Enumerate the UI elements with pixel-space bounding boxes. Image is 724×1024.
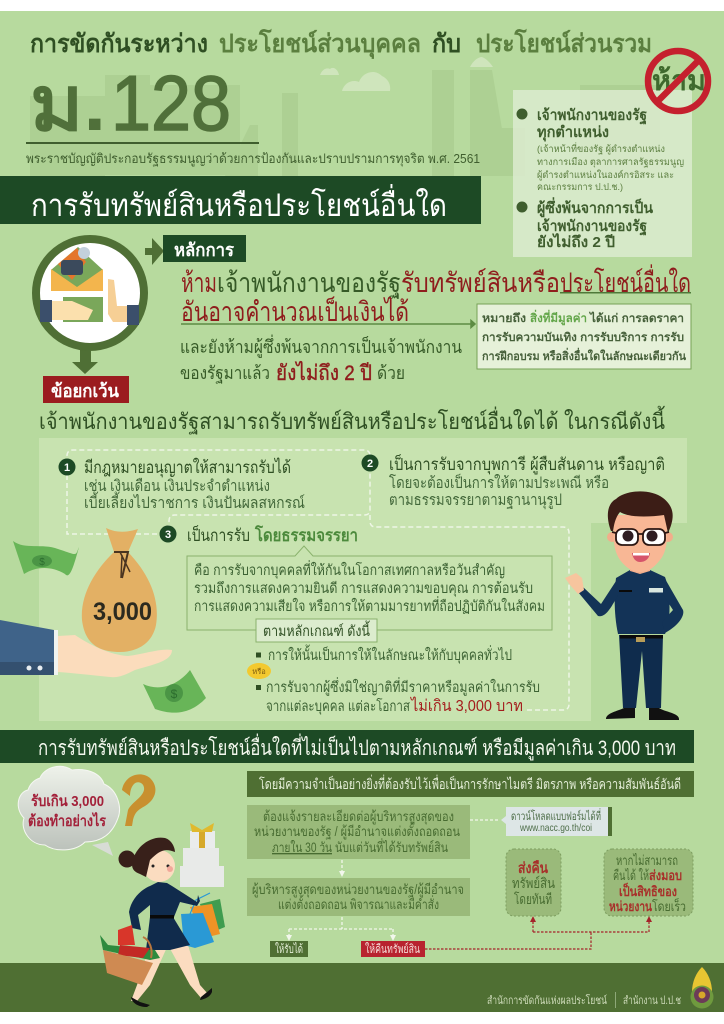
officer glasses <box>616 529 665 545</box>
woman legs <box>131 945 208 1001</box>
connector dashes <box>67 450 569 710</box>
callout: definition: การฝึกอบรม หรือสิ่งอื่นใดในลักษณะเดียวกัน <box>482 347 686 363</box>
icon: banknote bottom <box>143 670 206 713</box>
criterion one: การให้นั้นเป็นการให้ในลักษณะให้กับบุคคลทั่วไป <box>268 644 512 664</box>
bullet one detail: ทางการเมือง ตุลาการศาลรัฐธรรมนูญ <box>537 157 684 168</box>
case one: เบี้ยเลี้ยงไปราชการ เงินปันผลสหกรณ์ <box>84 491 305 512</box>
callout: definition: การรับความบันเทิง การรับบริการ การรับ <box>482 331 684 344</box>
icon: giving hand <box>0 620 172 677</box>
former official statement: ด้วย <box>377 363 405 383</box>
officer hair <box>608 491 673 533</box>
officer legs <box>619 635 663 708</box>
option: return immediately: โดยทันที <box>514 891 552 907</box>
arrow: to principle <box>145 238 164 265</box>
footer credits: สำนักงาน ป.ป.ช <box>623 995 681 1007</box>
icon: prohibited sign <box>648 51 708 111</box>
step: report <box>247 805 470 859</box>
outcome: return: ให้คืนทรัพย์สิน <box>365 942 420 956</box>
woman torso and arms <box>129 882 200 930</box>
former official statement: และยังห้ามผู้ซึ่งพ้นจากการเป็นเจ้าพนักงาน <box>180 334 462 358</box>
icon: envelope and refusing hand <box>36 239 144 347</box>
case two: เป็นการรับจากบุพการี ผู้สืบสันดาน หรือญาติ <box>389 453 665 475</box>
thought cloud <box>18 766 119 856</box>
option: hand over to agency: หากไม่สามารถ <box>616 853 678 868</box>
case one <box>58 457 305 512</box>
case three <box>160 524 358 545</box>
officer badge <box>649 588 663 592</box>
bullet one detail: (เจ้าหน้าที่ของรัฐ ผู้ดำรงตำแหน่ง <box>537 142 665 155</box>
gift basket <box>100 935 160 960</box>
bullet one <box>516 107 647 142</box>
arrow: to exception <box>72 350 98 374</box>
woman skirt <box>146 917 190 950</box>
icon: money bag <box>82 528 157 652</box>
criterion two: การรับจากผู้ซึ่งมิใช่ญาติที่มีราคาหรือมูลค่าในการรับ <box>266 677 540 696</box>
callout: download form: ดาวน์โหลดแบบฟอร์มได้ที่ <box>511 808 601 823</box>
bullet one: ทุกตำแหน่ง <box>537 124 609 142</box>
bullet two: ยังไม่ถึง 2 ปี <box>537 232 615 251</box>
case one: 1 <box>64 462 70 474</box>
label: exception <box>43 376 129 403</box>
callout: download form: www.nacc.go.th/coi <box>519 822 592 834</box>
former official statement <box>180 334 462 385</box>
case one: เช่น เงินเดือน เงินประจำตำแหน่ง <box>84 477 270 495</box>
criterion two: จากแต่ละบุคคล แต่ละโอกาส <box>266 697 410 715</box>
label: criteria <box>256 619 377 642</box>
outcome: return <box>361 941 425 957</box>
callout: download form <box>501 807 612 836</box>
case three: 3 <box>165 529 171 541</box>
note bar <box>247 771 694 797</box>
option: hand over to agency: เป็นสิทธิของ <box>619 882 677 899</box>
bullet one: เจ้าพนักงานของรัฐ <box>537 107 647 125</box>
label: principle <box>163 235 246 262</box>
case three: เป็นการรับ <box>187 524 250 545</box>
step: consider: ผู้บริหารสูงสุดของหน่วยงานของรัฐ/ผู้มีอำนาจ <box>252 882 464 898</box>
bullet one detail <box>537 142 684 193</box>
callout: ethics definition <box>187 546 552 630</box>
case three: โดยธรรมจรรยา <box>254 525 358 545</box>
label: criteria: ตามหลักเกณฑ์ ดังนี้ <box>263 620 370 640</box>
callout: definition: ได้แก่ การลดราคา <box>588 311 684 325</box>
step: consider <box>247 878 470 916</box>
principle statement: รับทรัพย์สินหรือ <box>401 267 560 298</box>
case two: ตามธรรมจรรยาตามฐานานุรูป <box>389 492 562 510</box>
title <box>30 28 652 60</box>
bullet one detail: คณะกรรมการ ป.ป.ช.) <box>537 182 623 193</box>
main heading band <box>0 176 481 224</box>
woman head <box>118 850 136 868</box>
principle statement: ห้าม <box>181 268 217 298</box>
bullet two: ผู้ซึ่งพ้นจากการเป็น <box>537 197 654 218</box>
option: return immediately: ทรัพย์สิน <box>512 875 555 891</box>
title: กับ <box>432 30 461 58</box>
bullet one detail: ผู้ดำรงตำแหน่งในองค์กรอิสระ และ <box>537 169 674 181</box>
callout: ethics definition: คือ การรับจากบุคคลที่ให้กันในโอกาสเทศกาลหรือวันสำคัญ <box>194 560 505 579</box>
case two: โดยจะต้องเป็นการให้ตามประเพณี หรือ <box>389 473 609 492</box>
red flow arrows <box>425 916 652 949</box>
officer arms <box>578 577 683 633</box>
bullet two: เจ้าพนักงานของรัฐ <box>537 218 647 236</box>
panel: who is covered <box>513 90 692 257</box>
background skyline <box>30 70 660 176</box>
bullet two <box>516 197 654 251</box>
shopping bags <box>200 899 225 934</box>
option: return immediately: ส่งคืน <box>518 860 549 877</box>
woman shoes <box>131 988 212 1007</box>
criterion two <box>256 677 540 715</box>
step: consider: แต่งตั้งถอดถอน พิจารณาและมีคำสั่ง <box>278 894 439 912</box>
principle statement: เจ้าพนักงานของรัฐ <box>217 268 401 299</box>
icon: prohibited sign: ห้าม <box>652 65 706 96</box>
heading: exceptions: เจ้าพนักงานของรัฐสามารถรับทรัพย์สินหรือประโยชน์อื่นใดได้ ในกรณีดังนี้ <box>39 406 665 435</box>
main heading band: การรับทรัพย์สินหรือประโยชน์อื่นใด <box>31 184 447 223</box>
title: ประโยชน์ส่วนรวม <box>476 28 652 58</box>
callout: ethics definition: รวมถึงการแสดงความยินดี การแสดงความขอบคุณ การต้อนรับ <box>194 580 533 597</box>
arrow: definition pointer <box>181 320 475 328</box>
outcome: accept <box>270 941 308 957</box>
criterion two: ไม่เกิน 3,000 บาท <box>409 696 523 715</box>
background clouds <box>320 57 493 91</box>
heading: section 128 <box>30 59 231 147</box>
act name: พระราชบัญญัติประกอบรัฐธรรมนูญว่าด้วยการป้องกันและปราบปรามการทุจริต พ.ศ. 2561 <box>26 151 480 167</box>
thought cloud: ต้องทำอย่างไร <box>28 811 107 830</box>
option: hand over to agency: คืนได้ ให้ <box>613 867 649 883</box>
icon: banknote top left: $ <box>39 557 45 568</box>
icon: banknote top left <box>13 541 79 575</box>
former official statement: ยังไม่ถึง 2 ปี <box>276 361 372 385</box>
step: report: นับแต่วันที่ได้รับทรัพย์สิน <box>335 838 448 855</box>
outcome: accept: ให้รับได้ <box>275 942 303 956</box>
criterion one <box>256 644 512 664</box>
step: report: ต้องแจ้งรายละเอียดต่อผู้บริหารสูงสุดของ <box>263 809 454 825</box>
thought cloud: รับเกิน 3,000 <box>31 792 104 810</box>
case two <box>362 453 665 510</box>
heading: section 128: ม. <box>30 62 106 147</box>
icon: question mark <box>122 774 155 826</box>
label: principle: หลักการ <box>174 240 234 260</box>
footer credits <box>487 992 681 1008</box>
former official statement: ของรัฐมาแล้ว <box>180 363 270 384</box>
callout: ethics definition: การแสดงความเสียใจ หรือการให้ตามมารยาทที่ถือปฏิบัติกันในสังคม <box>194 596 545 615</box>
character: male officer <box>565 491 683 720</box>
step: report: หน่วยงานของรัฐ / ผู้มีอำนาจแต่งตั้งถอดถอน <box>254 821 460 840</box>
footer credits: สำนักการขัดกันแห่งผลประโยชน์ <box>487 993 607 1007</box>
label: exception: ข้อยกเว้น <box>51 381 120 401</box>
section heading band <box>0 730 694 763</box>
option: return immediately <box>506 849 561 916</box>
badge: or: หรือ <box>252 667 266 676</box>
character: woman carrying gifts <box>100 823 225 1007</box>
gift boxes <box>190 831 215 848</box>
underline <box>26 142 259 144</box>
officer torso <box>615 570 670 634</box>
logo: NACC emblem <box>690 967 714 1008</box>
officer neck and face <box>630 563 650 574</box>
officer belt <box>620 635 663 638</box>
badge: or <box>247 663 271 679</box>
case one: มีกฎหมายอนุญาตให้สามารถรับได้ <box>84 457 291 478</box>
callout: definition: สิ่งที่มีมูลค่า <box>530 309 587 326</box>
option: hand over to agency: หน่วยงาน <box>609 899 653 914</box>
icon: banknote bottom: $ <box>171 687 178 701</box>
title: ประโยชน์ส่วนบุคคล <box>219 28 421 60</box>
callout: definition: หมายถึง <box>482 312 526 325</box>
callout: definition <box>477 304 691 369</box>
case two: 2 <box>367 458 373 470</box>
officer hand <box>565 573 584 594</box>
panel: exceptions <box>39 438 687 721</box>
heading: section 128: 128 <box>111 59 231 147</box>
footer band <box>0 963 724 1012</box>
officer mouth <box>632 553 650 562</box>
title: การขัดกันระหว่าง <box>30 30 208 58</box>
officer shoes <box>606 708 679 720</box>
option: hand over to agency: โดยเร็ว <box>652 897 686 914</box>
option: hand over to agency <box>604 849 693 916</box>
option: hand over to agency: ส่งมอบ <box>649 868 682 883</box>
white flow arrows <box>286 820 500 941</box>
principle statement: อันอาจคำนวณเป็นเงินได้ <box>181 294 409 327</box>
principle statement <box>181 264 691 327</box>
icon: money bag: 3,000 <box>93 598 152 626</box>
step: report: ภายใน 30 วัน <box>272 839 332 855</box>
